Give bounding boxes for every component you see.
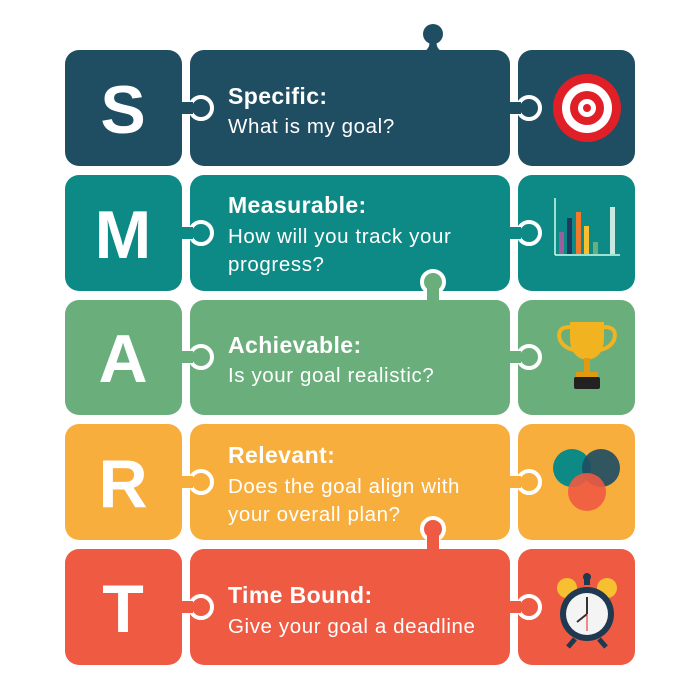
row: Measurable: How will you track your [228, 225, 451, 248]
row: Relevant: your overall plan? [228, 503, 401, 526]
row: Achievable [65, 271, 635, 415]
knob into Measurable [422, 271, 444, 302]
row: Achievable: Is your goal realistic? [228, 364, 434, 387]
row: Specific: What is my goal? [228, 115, 395, 138]
text: Specific: Specific: [228, 83, 327, 109]
letter S: S [100, 72, 146, 148]
row: Time Bound [65, 518, 635, 665]
letter M: M [95, 197, 151, 273]
letter T: T [102, 571, 144, 647]
row: Measurable: progress? [228, 253, 325, 276]
text: Relevant: Relevant: [228, 442, 335, 468]
text: Achievable: Achievable: [228, 332, 362, 358]
row: Relevant: Does the goal align with [228, 475, 460, 498]
icon: venn circles [553, 449, 620, 511]
letter A: A [98, 321, 148, 397]
icon: bar chart [555, 198, 620, 255]
icon: trophy [559, 322, 615, 389]
letter R: R [98, 446, 148, 522]
icon: target [553, 74, 621, 142]
top knob [423, 24, 443, 52]
knob into Relevant [422, 518, 444, 551]
row: Relevant [65, 424, 635, 540]
row: Time Bound: Give your goal a deadline [228, 615, 476, 638]
row: Measurable [65, 175, 635, 291]
icon: alarm clock [557, 573, 617, 647]
row: Specific [65, 24, 635, 166]
text: Time Bound: Time Bound: [228, 582, 373, 608]
text: Measurable: Measurable: [228, 192, 367, 218]
